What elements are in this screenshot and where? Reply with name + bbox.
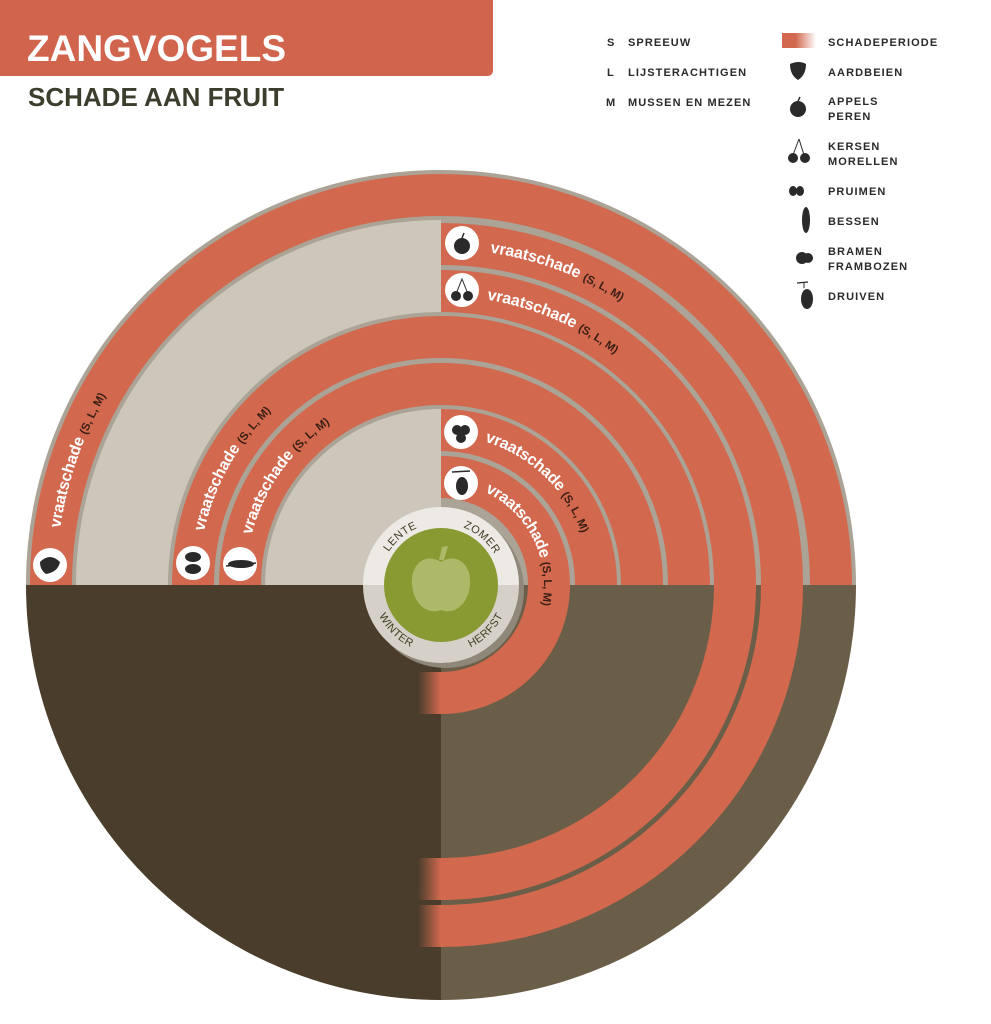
center season dial [363, 507, 524, 668]
ring: appels [418, 244, 782, 947]
legend: fruit: SCHADEPERIODE [828, 37, 938, 49]
subtitle: SCHADE AAN FRUIT [28, 82, 284, 112]
icon: apple [412, 546, 470, 611]
arc labels: vraatschade (S, L, M) [488, 484, 552, 606]
legend: birds: LIJSTERACHTIGEN [628, 67, 747, 79]
ring: bramen [441, 430, 596, 585]
legend: fruit: APPELS [828, 96, 879, 108]
legend: birds: MUSSEN EN MEZEN [628, 97, 751, 109]
title bar [0, 0, 493, 76]
legend: fruit: BESSEN [828, 216, 880, 228]
ring: bessen [240, 384, 642, 585]
title bar: ZANGVOGELS [27, 28, 286, 69]
center season dial: WINTER [380, 612, 413, 647]
center season dial: LENTE [383, 522, 416, 552]
legend: fruit: FRAMBOZEN [828, 261, 908, 273]
legend: fruit: MORELLEN [828, 156, 899, 168]
circular chart [26, 170, 856, 1000]
arc labels: vraatschade (S, L, M) [491, 244, 624, 302]
legend: birds [606, 37, 751, 109]
legend: fruit: BRAMEN [828, 246, 883, 258]
legend: fruit: DRUIVEN [828, 291, 885, 303]
legend: fruit: KERSEN [828, 141, 880, 153]
legend: fruit: PEREN [828, 111, 871, 123]
arc labels [52, 244, 624, 606]
legend: fruit: AARDBEIEN [828, 67, 903, 79]
arc labels: vraatschade (S, L, M) [52, 393, 107, 527]
legend: fruit: PRUIMEN [828, 186, 886, 198]
arc labels: vraatschade (S, L, M) [488, 433, 589, 532]
legend: birds: L [607, 67, 615, 79]
center season dial: ZOMER [464, 520, 500, 554]
arc labels: vraatschade (S, L, M) [488, 291, 618, 355]
ring: kersen [418, 291, 735, 900]
ring: aardbeien [51, 195, 831, 585]
ring: druiven [418, 477, 549, 714]
legend: birds: S [607, 37, 615, 49]
legend: fruit [782, 33, 938, 309]
legend: birds: M [606, 97, 616, 109]
ring: pruimen [193, 337, 689, 585]
legend: birds: SPREEUW [628, 37, 691, 49]
arc labels: vraatschade (S, L, M) [196, 406, 272, 530]
ring icons [33, 226, 479, 582]
center season dial: HERFST [468, 612, 502, 648]
arc labels: vraatschade (S, L, M) [243, 418, 330, 533]
